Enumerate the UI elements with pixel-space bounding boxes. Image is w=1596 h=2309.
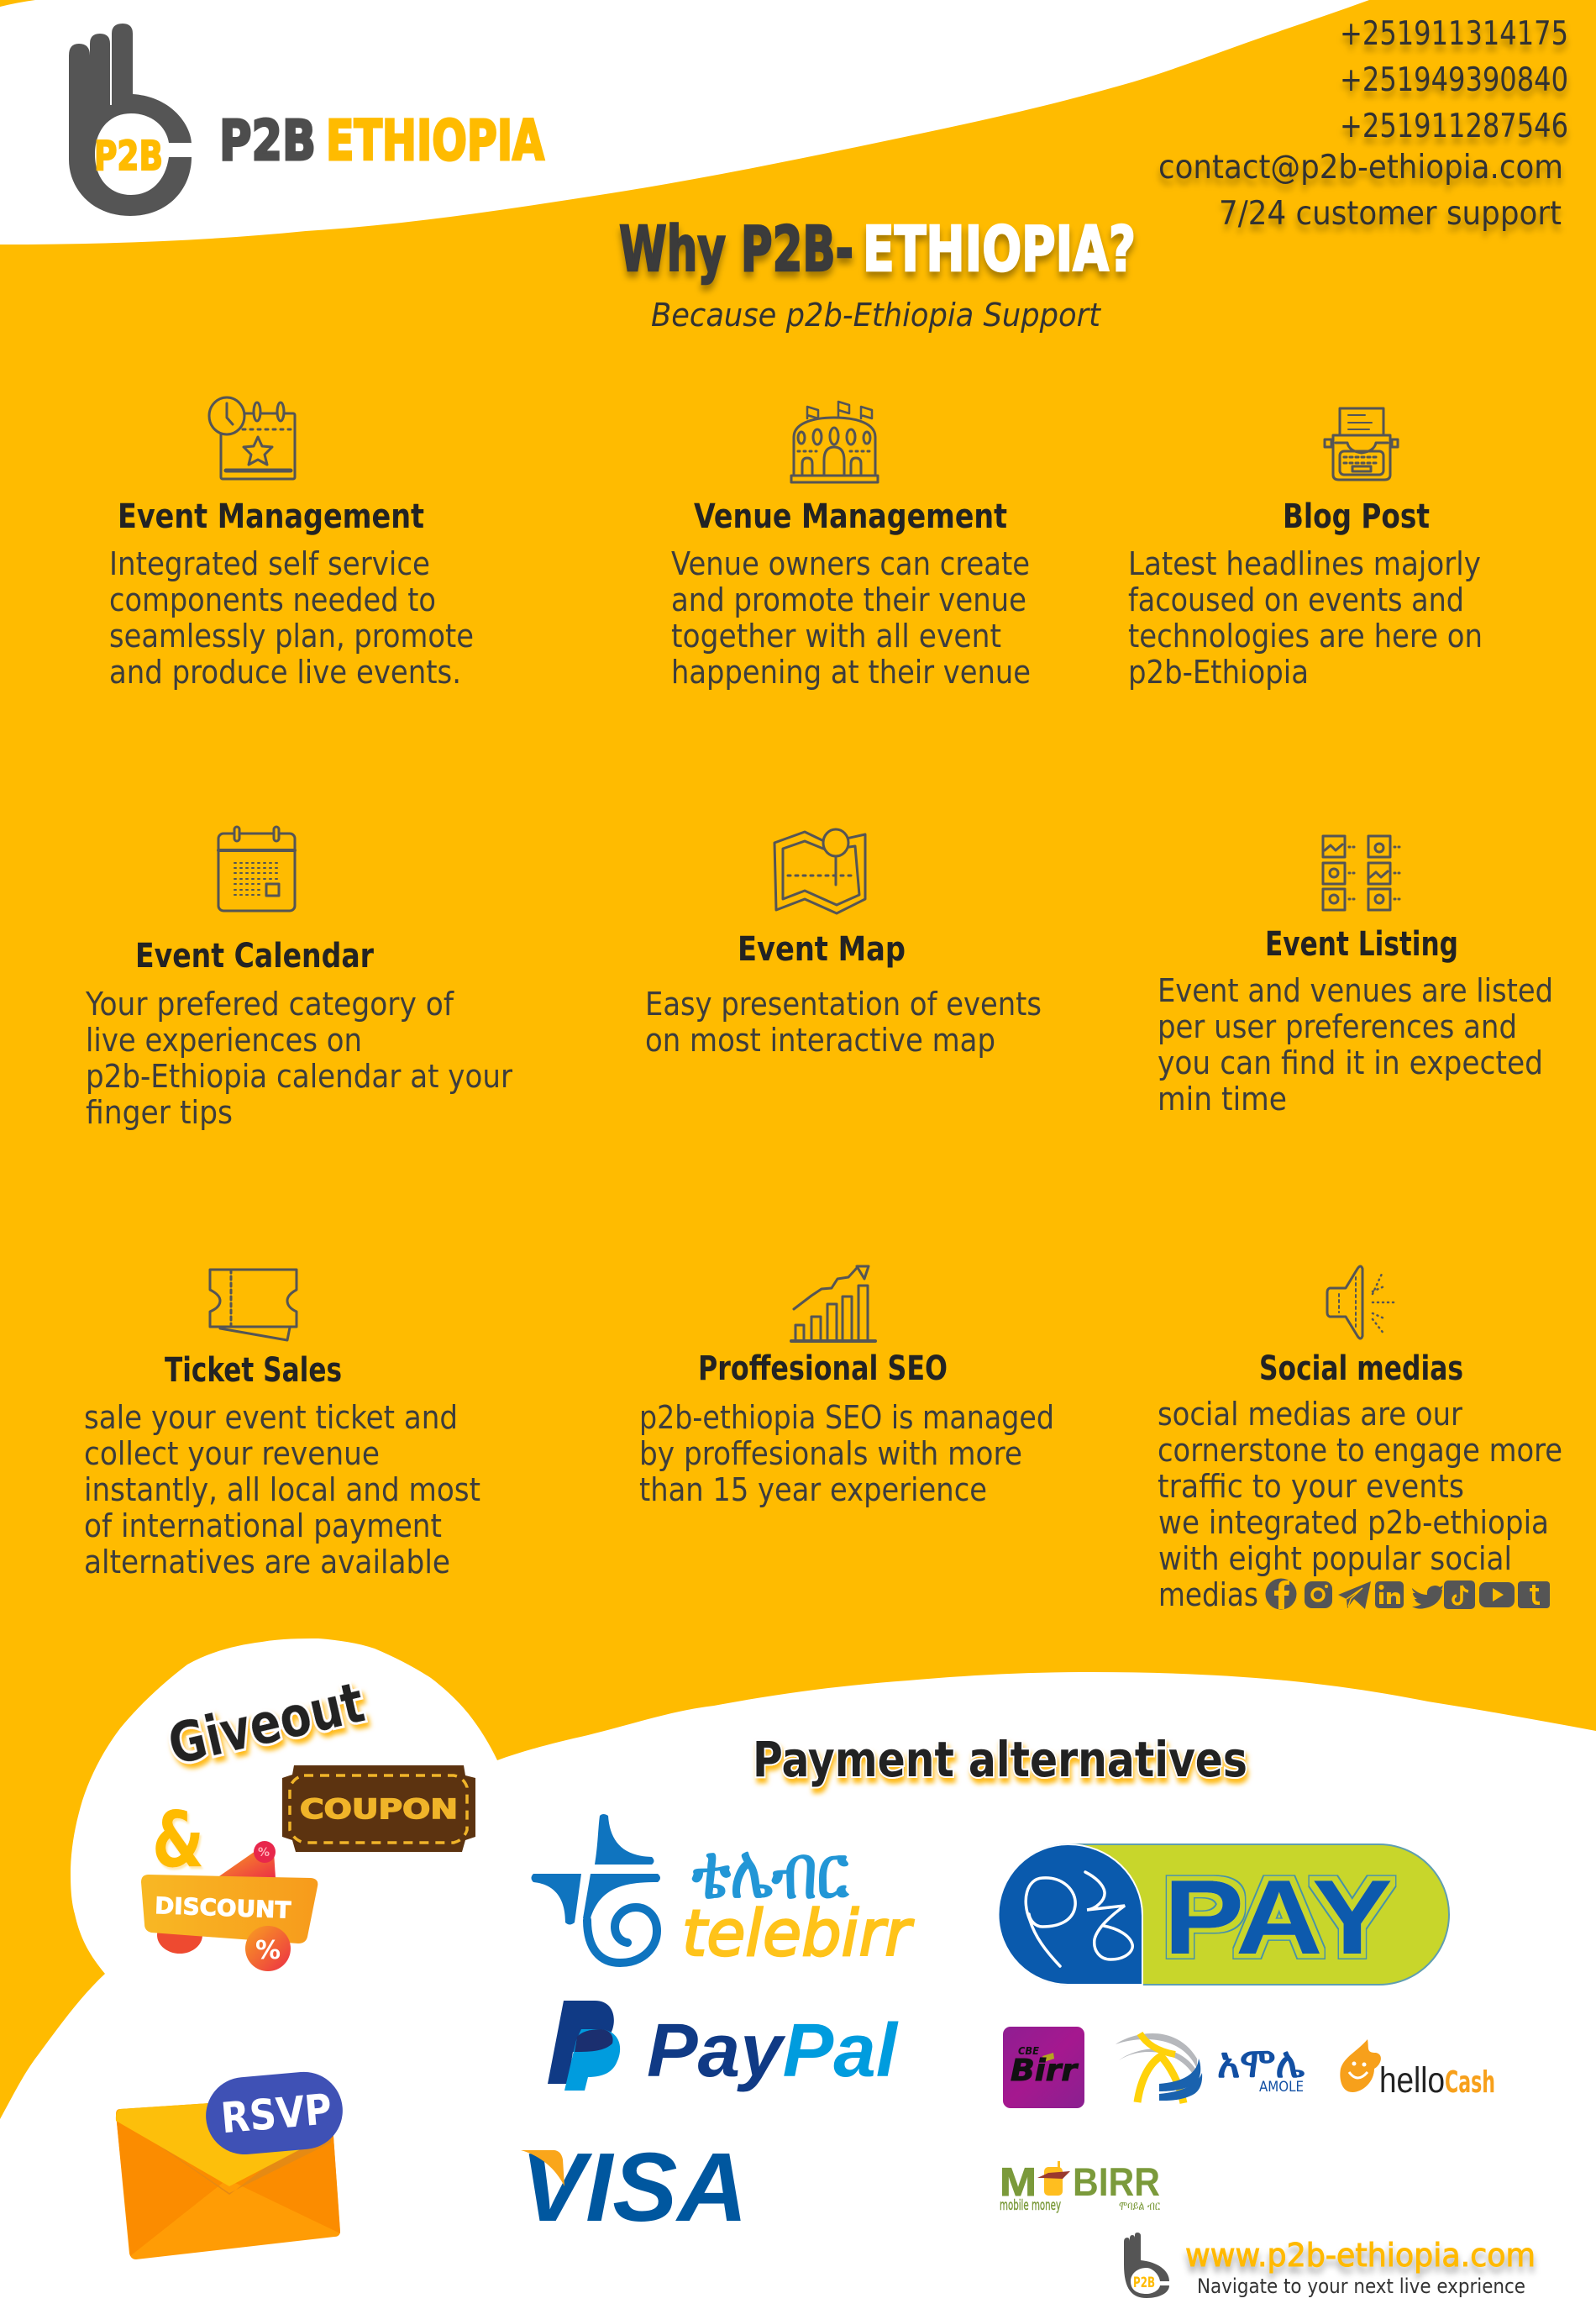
description: together with all event (671, 618, 1001, 655)
description: Venue owners can create (671, 545, 1030, 582)
logo: p2b pay: PAY (1163, 1858, 1393, 1976)
logo: telebirr (531, 1814, 915, 1970)
icon: ticket (210, 1270, 297, 1340)
envelope (116, 2096, 340, 2259)
rsvp pill: RSVP (219, 2085, 333, 2143)
description: of international payment (84, 1507, 442, 1544)
description: p2b-ethiopia SEO is managed (639, 1399, 1054, 1436)
description: Latest headlines majorly (1128, 545, 1481, 582)
paypal mark (548, 2001, 620, 2091)
description (84, 1399, 480, 1581)
logo: m-birr: BIRR (1073, 2159, 1160, 2204)
heading: Venue Management (694, 497, 1007, 536)
panel: venue management (671, 402, 1031, 691)
icon: map with pin (774, 829, 865, 913)
logo: p2b pay (999, 1844, 1449, 1985)
panel: social medias (1158, 1266, 1562, 1613)
description (1158, 1396, 1562, 1613)
heading: Proffesional SEO (698, 1349, 948, 1388)
description: Integrated self service (109, 545, 430, 582)
icon: tiktok (1444, 1581, 1475, 1609)
discount badge: DISCOUNT (155, 1893, 291, 1924)
description: on most interactive map (645, 1022, 995, 1059)
logo: amole (1116, 2033, 1305, 2103)
description: social medias are our (1158, 1396, 1462, 1433)
panel: event management (109, 397, 474, 691)
description: Your prefered category of (85, 986, 454, 1023)
paypal wordmark: PayPal (647, 2009, 899, 2093)
icon: twitter (1412, 1586, 1443, 1609)
footer logo mark: P2B (1133, 2275, 1155, 2291)
icon: youtube (1479, 1582, 1515, 1607)
description: we integrated p2b-ethiopia (1158, 1504, 1549, 1541)
panel: event calendar (85, 827, 512, 1131)
logo hand mark: P2B (94, 133, 163, 180)
main title: Why P2B- (619, 213, 853, 286)
description: and produce live events. (109, 654, 461, 691)
heading: Social medias (1259, 1349, 1463, 1388)
description: by proffesionals with more (639, 1435, 1022, 1472)
icon: instagram (1305, 1581, 1332, 1608)
contact block (1158, 15, 1568, 233)
icon: calendar (218, 827, 295, 911)
description: Easy presentation of events (645, 986, 1042, 1023)
description: instantly, all local and most (84, 1471, 480, 1508)
amole latin name: AMOLE (1259, 2079, 1304, 2096)
description: min time (1158, 1081, 1287, 1118)
description (1158, 972, 1553, 1118)
description: Event and venues are listed (1158, 972, 1553, 1009)
logo: m-birr (1000, 2159, 1161, 2214)
bottom white curved panel with bubble (0, 1638, 1596, 2309)
heading: Event Map (738, 930, 906, 969)
description (1128, 545, 1483, 691)
description: technologies are here on (1128, 618, 1483, 655)
coupon tag (282, 1765, 475, 1852)
logo: m-birr: M (1000, 2159, 1037, 2204)
icon: megaphone speaker (1327, 1266, 1394, 1339)
logo: hellocash (1340, 2039, 1495, 2101)
footer tagline: Navigate to your next live exprience (1197, 2275, 1525, 2298)
logo: P2B Ethiopia (69, 24, 544, 216)
heading: Event Listing (1265, 925, 1458, 964)
logo: cbe birr (1003, 2027, 1084, 2108)
logo: paypal (548, 2001, 899, 2093)
description (671, 545, 1031, 691)
description: alternatives are available (84, 1544, 450, 1581)
contact block: 7/24 customer support (1219, 195, 1562, 233)
description: p2b-Ethiopia (1128, 654, 1309, 691)
description: than 15 year experience (639, 1471, 987, 1508)
main title (619, 213, 1136, 286)
description: you can find it in expected (1158, 1044, 1543, 1081)
logo: m-birr: ሞባይል ብር (1119, 2198, 1161, 2213)
logo: cbe birr: Birr (1011, 2054, 1079, 2088)
description: sale your event ticket and (84, 1399, 458, 1436)
logo: cbe birr: CBE (1018, 2045, 1040, 2057)
description: live experiences on (86, 1022, 362, 1059)
description: happening at their venue (671, 654, 1031, 691)
description (639, 1399, 1054, 1508)
icon: listing grid (1323, 836, 1400, 910)
icon: calendar with clock (209, 397, 295, 479)
description: finger tips (86, 1094, 233, 1131)
icon row: social networks (1265, 1578, 1550, 1610)
icon: telegram (1338, 1581, 1371, 1609)
main title: ETHIOPIA? (863, 213, 1136, 286)
heading: Ticket Sales (165, 1351, 342, 1390)
description (85, 986, 512, 1131)
description: seamlessly plan, promote (109, 618, 474, 655)
icon: tumblr (1518, 1581, 1550, 1608)
panel: event map (645, 829, 1042, 1059)
logo: hellocash: Cash (1445, 2065, 1495, 2100)
description: with eight popular social (1158, 1540, 1512, 1577)
logo hand mark (69, 24, 192, 216)
giveout heading: Giveout (162, 1670, 370, 1778)
heading: Event Calendar (135, 937, 374, 976)
description: and promote their venue (671, 581, 1026, 618)
logo: m-birr: mobile money (1000, 2197, 1061, 2214)
hellocash wordmark: hello (1379, 2060, 1445, 2101)
description: p2b-Ethiopia calendar at your (86, 1058, 512, 1095)
logo wordmark: P2B (219, 108, 316, 173)
payment alternatives heading: Payment alternatives (753, 1731, 1247, 1788)
ampersand: & (152, 1795, 204, 1885)
discount badge: % (255, 1936, 281, 1965)
panel: ticket sales (84, 1270, 480, 1581)
amole symbol (1116, 2033, 1202, 2103)
panel: blog post (1128, 408, 1483, 691)
icon: facebook (1265, 1578, 1297, 1610)
contact block: contact@p2b-ethiopia.com (1158, 149, 1563, 187)
icon: linkedin (1375, 1581, 1404, 1608)
logo: visa: VISA (521, 2133, 748, 2242)
footer website: www.p2b-ethiopia.com (1185, 2237, 1536, 2274)
amole amharic name: አሞሌ (1217, 2038, 1305, 2087)
icon: typewriter (1325, 408, 1398, 480)
telebirr symbol (531, 1814, 660, 1963)
description: facoused on events and (1128, 581, 1464, 618)
footer logo mark (1124, 2233, 1169, 2298)
panel: professional SEO (639, 1266, 1054, 1508)
description: per user preferences and (1158, 1008, 1517, 1045)
top white curved header (0, 0, 1369, 245)
logo: P2B Ethiopia: ETHIOPIA (326, 108, 544, 173)
description (109, 545, 474, 691)
heading: Event Management (118, 497, 424, 536)
heading: Blog Post (1283, 497, 1430, 536)
icon: growth chart (791, 1266, 875, 1341)
subtitle: Because p2b-Ethiopia Support (651, 297, 1102, 334)
description: components needed to (109, 581, 436, 618)
description: collect your revenue (84, 1435, 380, 1472)
telebirr amharic name: ቴሌብር (691, 1828, 849, 1915)
giveout bubble (141, 1670, 475, 1971)
description: traffic to your events (1158, 1468, 1464, 1505)
hellocash mascot (1340, 2039, 1381, 2092)
rsvp pill (202, 2069, 346, 2158)
description (645, 986, 1042, 1059)
telebirr latin name: telebirr (682, 1896, 915, 1970)
coupon tag: COUPON (300, 1793, 458, 1825)
icon: venue (791, 402, 878, 482)
discount badge (141, 1841, 318, 1971)
description: medias (1158, 1576, 1258, 1613)
panel: event listing (1158, 836, 1553, 1118)
discount badge: % (258, 1846, 270, 1859)
rsvp envelope (116, 2069, 346, 2259)
